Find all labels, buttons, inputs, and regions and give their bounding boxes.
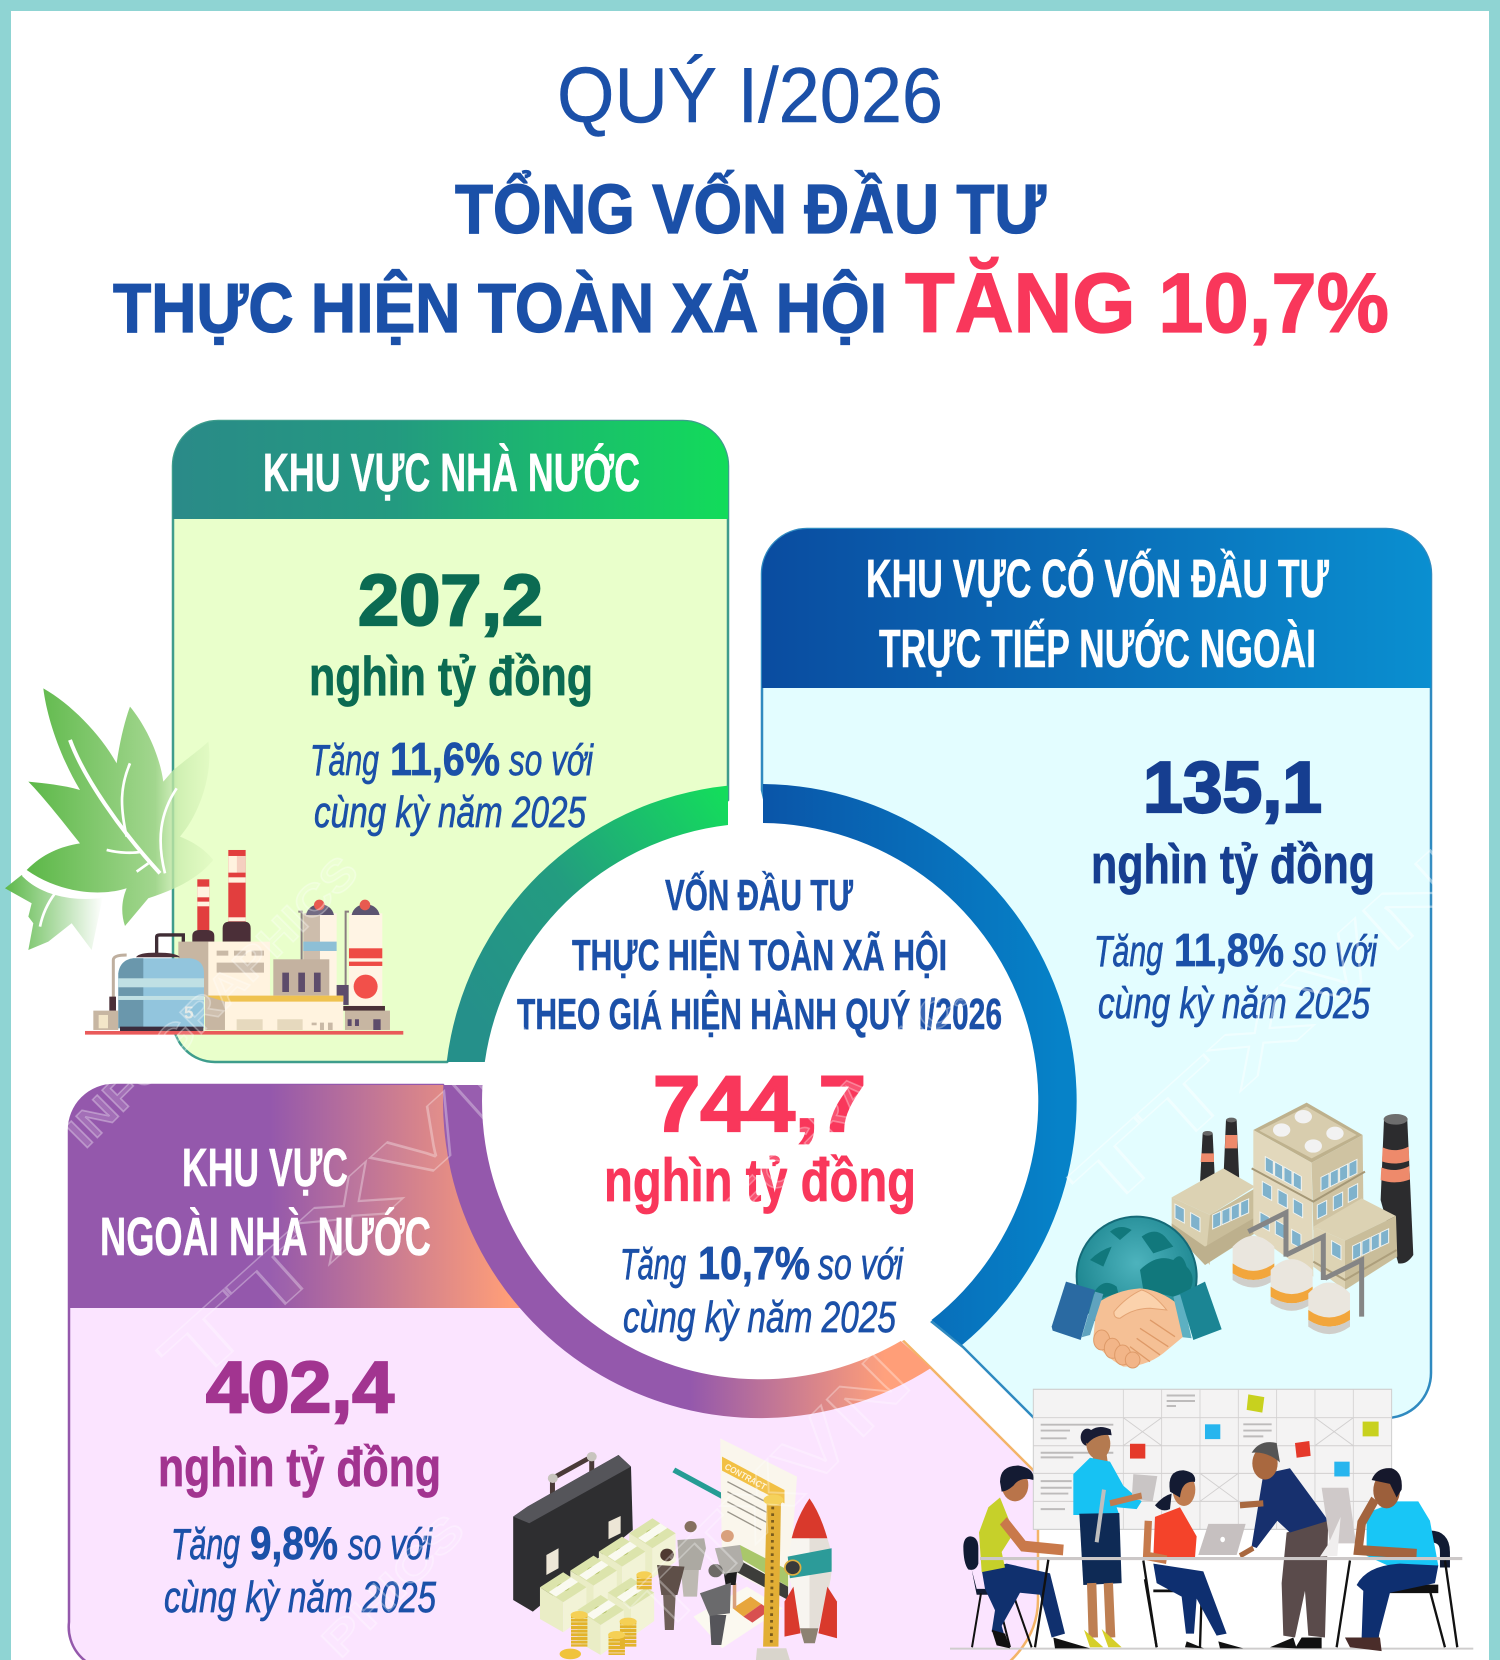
illustration: team at table xyxy=(950,1389,1473,1651)
icon: briefcase, money, team and rocket: CONTRACT xyxy=(723,1462,769,1492)
arc: purple-orange xyxy=(443,1085,931,1418)
unit: nghìn tỷ đồng xyxy=(309,645,593,707)
title: growth highlight: TĂNG 10,7% xyxy=(905,256,1389,350)
title: quarter: QUÝ I/2026 xyxy=(557,51,943,139)
total comparison: cùng kỳ năm 2025 xyxy=(623,1293,896,1342)
pipes and tanks xyxy=(1248,1213,1362,1317)
growth line: so với xyxy=(1293,927,1378,976)
panel body xyxy=(69,1085,1038,1660)
person 3 and laptop xyxy=(1145,1470,1246,1648)
left wing xyxy=(1172,1168,1255,1215)
person 4 xyxy=(1240,1442,1328,1648)
total growth: so với xyxy=(818,1240,904,1289)
right wing xyxy=(1313,1198,1396,1241)
comparison line: cùng kỳ năm 2025 xyxy=(164,1573,436,1622)
handshake xyxy=(1093,1288,1183,1367)
floor xyxy=(950,1648,1473,1650)
header text 2: NGOÀI NHÀ NƯỚC xyxy=(100,1207,431,1267)
cash xyxy=(629,1518,676,1578)
contract xyxy=(720,1438,797,1600)
watermark: INFOGRAPHICS xyxy=(57,847,368,1157)
value: 135,1 xyxy=(1143,748,1322,828)
icon: state factory: 5 xyxy=(184,1002,194,1022)
business people xyxy=(677,1521,706,1597)
icon: briefcase, money, team and rocket xyxy=(513,1438,837,1660)
growth line: Tăng xyxy=(1094,927,1163,976)
comparison line: cùng kỳ năm 2025 xyxy=(1098,979,1370,1028)
total growth: 10,7% xyxy=(698,1237,810,1289)
chimney right xyxy=(1381,1120,1413,1264)
header text: KHU VỰC xyxy=(182,1138,348,1198)
watermark: INFOGRAPHICS xyxy=(692,961,989,1257)
title block xyxy=(113,51,1389,350)
panel: non-state sector xyxy=(69,1085,1038,1660)
panel header xyxy=(69,1085,560,1308)
total value: 744,7 xyxy=(653,1059,866,1148)
crane xyxy=(763,1503,781,1647)
center heading 2: THỰC HIỆN TOÀN XÃ HỘI xyxy=(572,929,947,980)
center circle xyxy=(443,784,1077,1418)
rocket xyxy=(788,1498,832,1628)
title: line 3: THỰC HIỆN TOÀN XÃ HỘI xyxy=(113,268,887,347)
white disc xyxy=(481,822,1039,1380)
icon: leaf xyxy=(5,688,213,950)
total growth: Tăng xyxy=(620,1240,686,1289)
arc: green xyxy=(447,786,728,1062)
main block xyxy=(1253,1103,1363,1163)
panel: state sector xyxy=(173,421,728,1062)
watermark: TTXVN xyxy=(144,1005,573,1403)
case xyxy=(513,1455,633,1612)
person 5 and monitor xyxy=(1320,1468,1445,1651)
total unit: nghìn tỷ đồng xyxy=(604,1147,916,1214)
table xyxy=(980,1557,1462,1647)
icon: state factory xyxy=(85,850,403,1035)
pen xyxy=(674,1470,729,1500)
growth line: Tăng xyxy=(310,736,379,785)
planning board xyxy=(1033,1389,1392,1529)
value: 207,2 xyxy=(358,561,543,641)
handle xyxy=(552,1457,592,1495)
watermark: TTXVN xyxy=(1055,832,1484,1230)
panel header xyxy=(173,421,728,519)
growth line: so với xyxy=(348,1520,433,1569)
growth line: 11,6% xyxy=(390,733,500,785)
panel: FDI sector xyxy=(762,529,1431,1418)
watermark xyxy=(57,832,1484,1660)
arc: blue xyxy=(763,784,1077,1345)
watermark: TTXVN xyxy=(612,1337,927,1652)
globe xyxy=(1077,1217,1197,1337)
growth line: so với xyxy=(509,736,594,785)
growth line: 11,8% xyxy=(1174,924,1284,976)
icon: globe, handshake and industrial complex xyxy=(1052,1103,1413,1368)
center heading 1: VỐN ĐẦU TƯ xyxy=(665,869,853,920)
unit: nghìn tỷ đồng xyxy=(158,1436,441,1498)
panel header xyxy=(762,529,1431,688)
unit: nghìn tỷ đồng xyxy=(1091,833,1375,895)
growth line: Tăng xyxy=(171,1520,240,1569)
center heading 3: THEO GIÁ HIỆN HÀNH QUÝ I/2026 xyxy=(517,989,1002,1039)
chair and person 1 xyxy=(963,1466,1090,1648)
person 2 xyxy=(1073,1427,1157,1647)
value: 402,4 xyxy=(206,1348,394,1428)
comparison line: cùng kỳ năm 2025 xyxy=(314,788,586,837)
header text: KHU VỰC NHÀ NƯỚC xyxy=(263,443,640,503)
small chimneys xyxy=(1199,1133,1216,1200)
growth line: 9,8% xyxy=(250,1517,338,1569)
title: line 2: TỔNG VỐN ĐẦU TƯ xyxy=(455,169,1047,248)
panel body xyxy=(762,529,1431,1418)
coins xyxy=(556,1615,602,1647)
panel body xyxy=(173,421,728,1062)
